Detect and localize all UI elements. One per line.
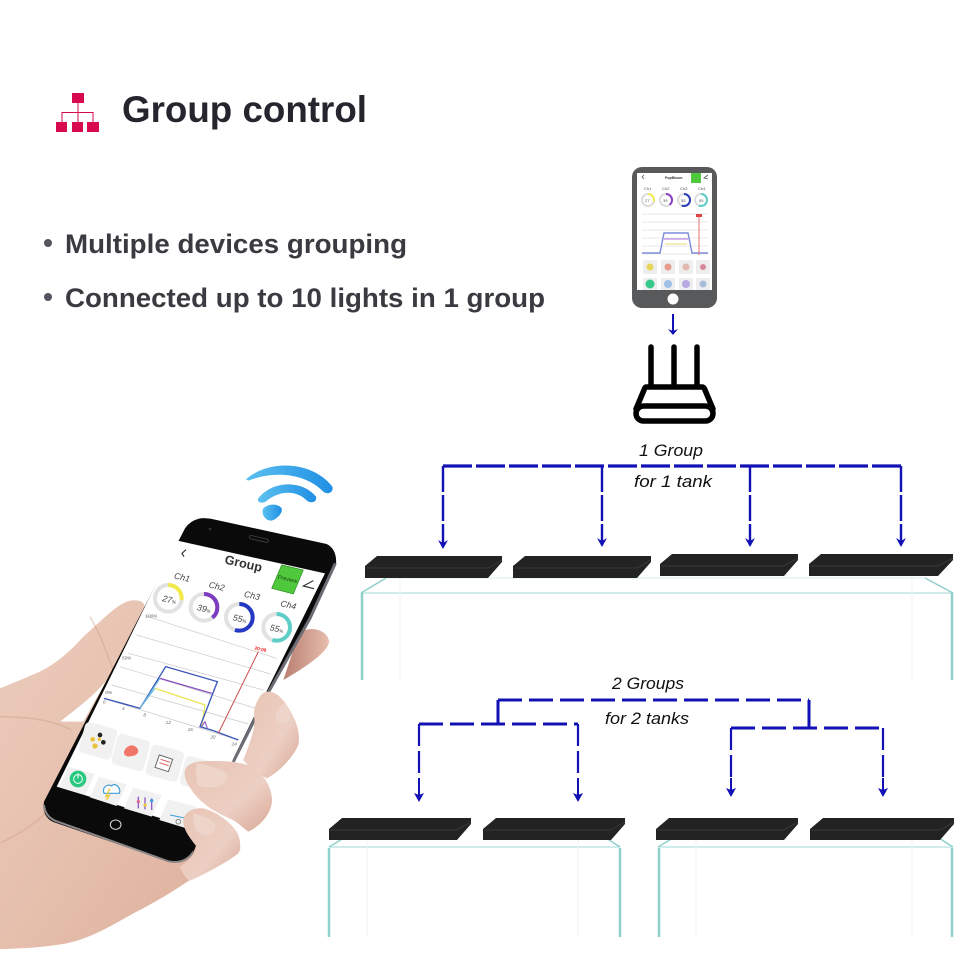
icon: tablet app device: Ch2 <box>662 186 670 191</box>
label: for 2 tanks: for 2 tanks <box>605 709 690 728</box>
chart: 100% <box>145 614 157 619</box>
channel rings <box>155 585 290 641</box>
connector: 2 groups dashed lines and arrows <box>414 700 888 802</box>
lights: two pairs on small tanks <box>329 818 954 840</box>
channel labels: 55% <box>269 622 285 635</box>
icon: group hierarchy <box>56 93 99 132</box>
icon: tablet app device: 39 <box>663 198 668 203</box>
icon: tablet app device: Ch4 <box>698 186 706 191</box>
tank: right small tank <box>658 838 953 937</box>
lights: row of four on large tank <box>365 554 953 578</box>
phone earpiece and camera <box>209 528 269 543</box>
phone screen <box>57 528 325 832</box>
app header: Group <box>223 553 264 575</box>
channel labels: 39% <box>196 602 212 615</box>
chart <box>103 614 277 746</box>
fingers over phone <box>180 692 299 881</box>
bullet list: Multiple devices grouping <box>65 229 407 259</box>
arrow: tablet to router <box>668 314 678 335</box>
channel labels: Ch2 <box>208 580 226 593</box>
chart: 12 <box>166 720 171 725</box>
chart: 24 <box>231 741 237 746</box>
bullet list <box>44 229 545 313</box>
icon: tablet app device <box>632 167 717 308</box>
label: for 1 tank: for 1 tank <box>634 472 714 491</box>
title: Group control <box>122 89 367 130</box>
icon: tablet app device: 27 <box>645 198 650 203</box>
tank: left small tank <box>329 838 620 937</box>
icon: router <box>636 347 713 421</box>
phone home button <box>110 820 121 829</box>
channel labels <box>161 571 297 635</box>
connector: 1 group dashed lines and arrows <box>438 466 906 549</box>
icon: tablet app device: Ch1 <box>644 186 652 191</box>
chart: 4 <box>122 706 125 711</box>
chart: 8 <box>143 713 146 718</box>
channel labels: Ch3 <box>243 589 261 602</box>
chart: 20:08 <box>254 645 267 653</box>
label: 2 groups: 2 Groups <box>611 674 685 693</box>
label: 1 group: 1 Group <box>639 441 703 460</box>
hand holding phone <box>0 466 336 949</box>
icon: tablet app device: Ch3 <box>680 186 688 191</box>
icon: wifi signal <box>246 466 333 521</box>
chart: 50% <box>122 655 131 660</box>
app icon glyphs <box>70 733 187 824</box>
app header <box>182 550 314 594</box>
app header: Preview <box>277 575 299 585</box>
channel labels: 55% <box>232 612 248 625</box>
chart: 0 <box>103 699 106 704</box>
tank: single large tank <box>361 578 953 680</box>
channel labels: Ch4 <box>280 598 297 612</box>
phone body <box>44 518 336 862</box>
icon: tablet app device: 55 <box>681 198 686 203</box>
hand: palm and back fingers <box>0 600 329 949</box>
icon: tablet app device: 55 <box>699 198 704 203</box>
icon: tablet app device: PopBloom <box>665 176 682 180</box>
channel labels: 27% <box>161 593 177 606</box>
chart: 16 <box>188 727 193 732</box>
channel labels: Ch1 <box>173 571 191 584</box>
chart: 0% <box>105 690 112 695</box>
bullet list: Connected up to 10 lights in 1 group <box>65 283 545 313</box>
app icon tiles <box>59 721 216 828</box>
chart: 20 <box>209 734 216 739</box>
